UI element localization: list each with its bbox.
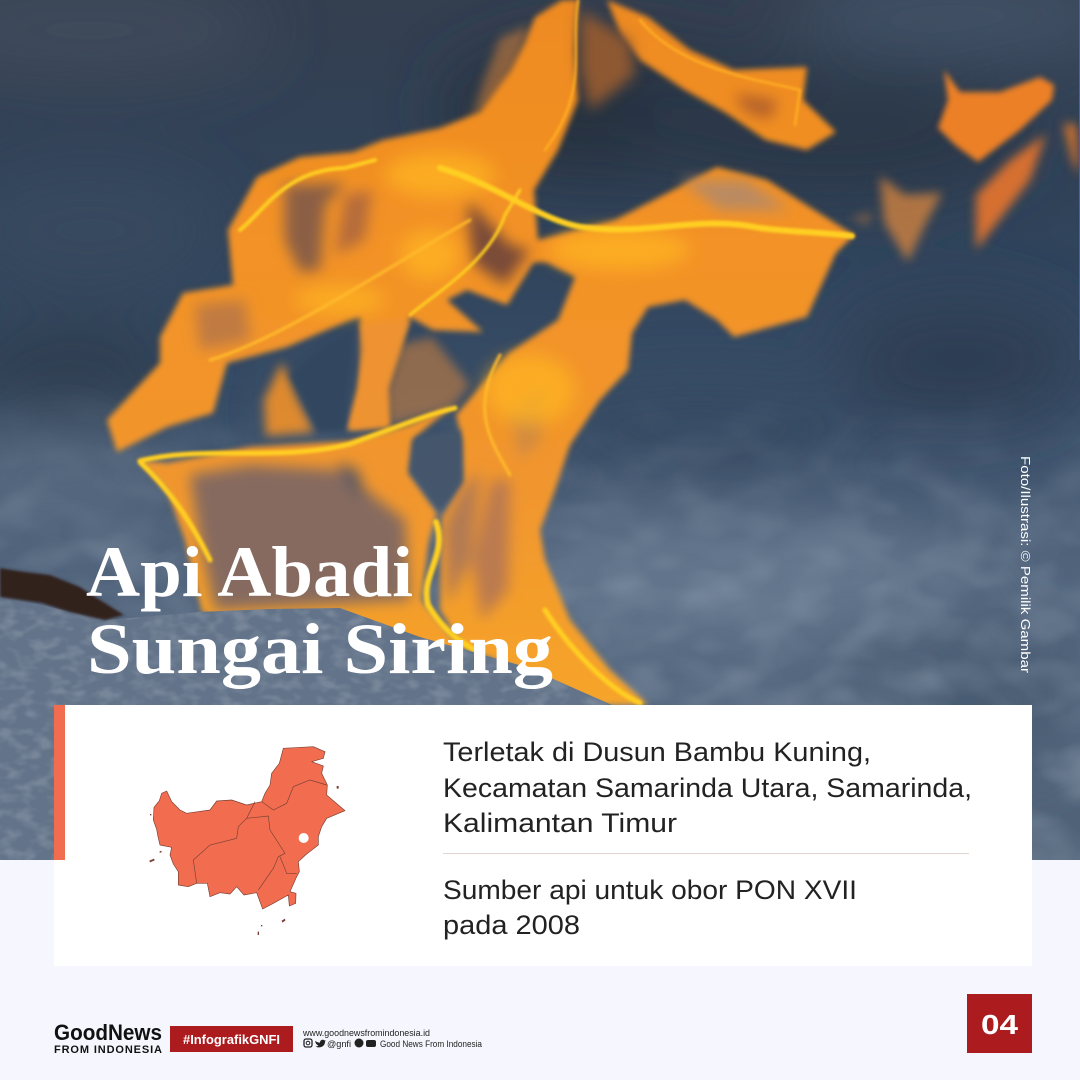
footer social info: Good News From Indonesia (380, 1039, 482, 1049)
PON text (443, 875, 857, 940)
footer social info: @gnfi (327, 1039, 351, 1049)
flame highlights (140, 0, 852, 703)
mottled cloud texture (0, 380, 1080, 860)
map: Kalimantan (149, 747, 345, 935)
background photo: flame over rocks (0, 0, 1080, 860)
flame hollows (190, 10, 790, 620)
location text (443, 737, 972, 838)
right ribbon (607, 0, 836, 150)
right arm and lower body (440, 167, 854, 705)
icon: youtube (366, 1040, 376, 1047)
flame (107, 0, 1079, 705)
footer logo: FROM INDONESIA (54, 1044, 162, 1056)
icon: instagram (304, 1039, 312, 1047)
title: Api Abadi (86, 532, 413, 612)
title (86, 532, 553, 689)
panel: location card (54, 705, 1032, 966)
icon: twitter (315, 1040, 326, 1047)
photo credit: Foto/Ilustrasi: © Pemilik Gambar (1018, 456, 1033, 674)
edge line (1079, 0, 1080, 360)
location text: Kecamatan Samarinda Utara, Samarinda, (443, 773, 972, 803)
hashtag badge (170, 1026, 293, 1052)
footer social info (302, 1028, 482, 1049)
foreground rock (0, 590, 620, 860)
main flame bodies (107, 0, 854, 705)
small islands (149, 786, 339, 935)
left ribbon going up (107, 0, 578, 452)
location marker (299, 833, 309, 843)
accent bar (54, 705, 65, 860)
icon: facebook (354, 1038, 364, 1048)
lower left veil (139, 406, 463, 650)
faint background tongues (264, 25, 1079, 436)
dark burnt rock (0, 568, 124, 620)
PON text: Sumber api untuk obor PON XVII (443, 875, 857, 905)
blurred rock backdrop (0, 0, 1080, 770)
location text: Kalimantan Timur (443, 808, 677, 838)
background gaps through flame (290, 320, 462, 512)
footer logo (54, 1020, 162, 1056)
title: Sungai Siring (87, 609, 553, 689)
location text: Terletak di Dusun Bambu Kuning, (443, 737, 871, 767)
hashtag badge: #InfografikGNFI (183, 1033, 280, 1047)
footer logo: GoodNews (54, 1020, 162, 1045)
detached flame (938, 70, 1054, 162)
flame bright areas (295, 153, 690, 425)
page number badge: 04 (981, 1009, 1018, 1040)
footer social info: www.goodnewsfromindonesia.id (302, 1028, 430, 1038)
PON text: pada 2008 (443, 910, 580, 940)
page number badge (967, 994, 1032, 1053)
